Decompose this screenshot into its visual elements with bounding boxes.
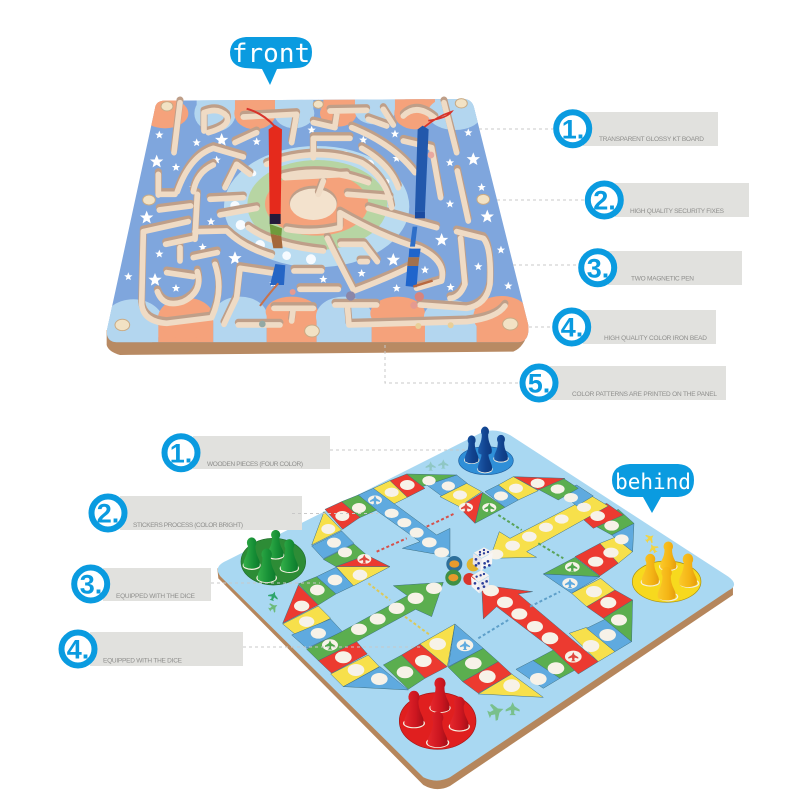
maze board: front xyxy=(100,93,540,355)
green pieces xyxy=(241,530,306,585)
callout: behind 4: EQUIPPED WITH THE DICE xyxy=(103,658,183,664)
board surface xyxy=(100,93,540,347)
dice xyxy=(471,547,493,593)
callout: behind 4 xyxy=(62,632,243,666)
callout: front 4: HIGH QUALITY COLOR IRON BEAD xyxy=(604,335,707,342)
pen: red xyxy=(247,109,285,306)
callout line: behind 2 xyxy=(292,512,378,514)
corner plane decals xyxy=(267,459,660,722)
bubble: front: front xyxy=(232,39,310,69)
callout: behind 1 xyxy=(164,436,330,469)
bubble: behind xyxy=(612,464,694,513)
red pieces xyxy=(399,677,476,749)
callout: front 4 xyxy=(555,310,716,344)
callout line: behind 1 xyxy=(330,449,465,451)
callout line: behind 4 xyxy=(243,646,420,648)
callout: front 1: 1. xyxy=(562,114,584,144)
callout: behind 3: 3. xyxy=(80,570,102,600)
plane marks on track xyxy=(325,495,578,661)
blue pieces xyxy=(459,427,513,475)
target rings xyxy=(224,146,409,267)
callout: front 1: TRANSPARENT GLOSSY KT BOARD xyxy=(599,136,704,143)
bubble: front xyxy=(230,37,312,85)
callout: front 3: TWO MAGNETIC PEN xyxy=(631,276,694,282)
callout: behind 1: 1. xyxy=(170,438,192,468)
track circles xyxy=(294,476,629,692)
callout: behind 1: WOODEN PIECES (FOUR COLOR) xyxy=(207,461,303,468)
callout line: front 4 xyxy=(529,326,553,328)
bottom colour stripes xyxy=(106,296,528,342)
stars xyxy=(124,126,512,292)
callout: behind 2 xyxy=(92,496,302,530)
callout: front 5: 5. xyxy=(528,368,550,398)
iron beads xyxy=(259,152,454,329)
callout: behind 2: 2. xyxy=(97,498,119,528)
callout: front 2 xyxy=(588,183,749,217)
callout: front 5: COLOR PATTERNS ARE PRINTED ON THE PANEL xyxy=(572,391,717,398)
board edge: wood xyxy=(107,330,528,355)
callout line: front 5 xyxy=(385,345,520,383)
callout: front 4: 4. xyxy=(561,312,583,342)
track xyxy=(283,474,634,697)
yellow pieces xyxy=(632,542,701,602)
callout line: behind 3 xyxy=(211,582,320,584)
callout line: front 3 xyxy=(513,264,578,266)
security pegs xyxy=(115,99,518,337)
callout line: front 1 xyxy=(479,128,553,130)
callout: behind 2: STICKERS PROCESS (COLOR BRIGHT) xyxy=(133,522,243,529)
callout: behind 3: EQUIPPED WITH THE DICE xyxy=(116,593,196,600)
callout: front 5 xyxy=(522,366,726,400)
pen: blue xyxy=(406,112,452,287)
centre medallions xyxy=(445,556,480,586)
callout: behind 4: 4. xyxy=(67,634,89,664)
callout: front 1 xyxy=(556,112,718,146)
callout: front 3 xyxy=(581,251,742,285)
callout: front 3: 3. xyxy=(587,254,609,284)
bubble: behind: behind xyxy=(615,470,691,494)
dotted shortcut arrows xyxy=(368,513,563,638)
flying chess board: behind xyxy=(217,427,734,789)
maze grooves xyxy=(142,100,505,325)
callout: front 2: 2. xyxy=(593,186,616,216)
callout: behind 3 xyxy=(74,568,211,601)
board surface xyxy=(218,430,734,781)
callout line: front 2 xyxy=(497,199,585,201)
board edge: wood xyxy=(217,568,733,789)
callout: front 2: HIGH QUALITY SECURITY FIXES xyxy=(630,208,725,215)
